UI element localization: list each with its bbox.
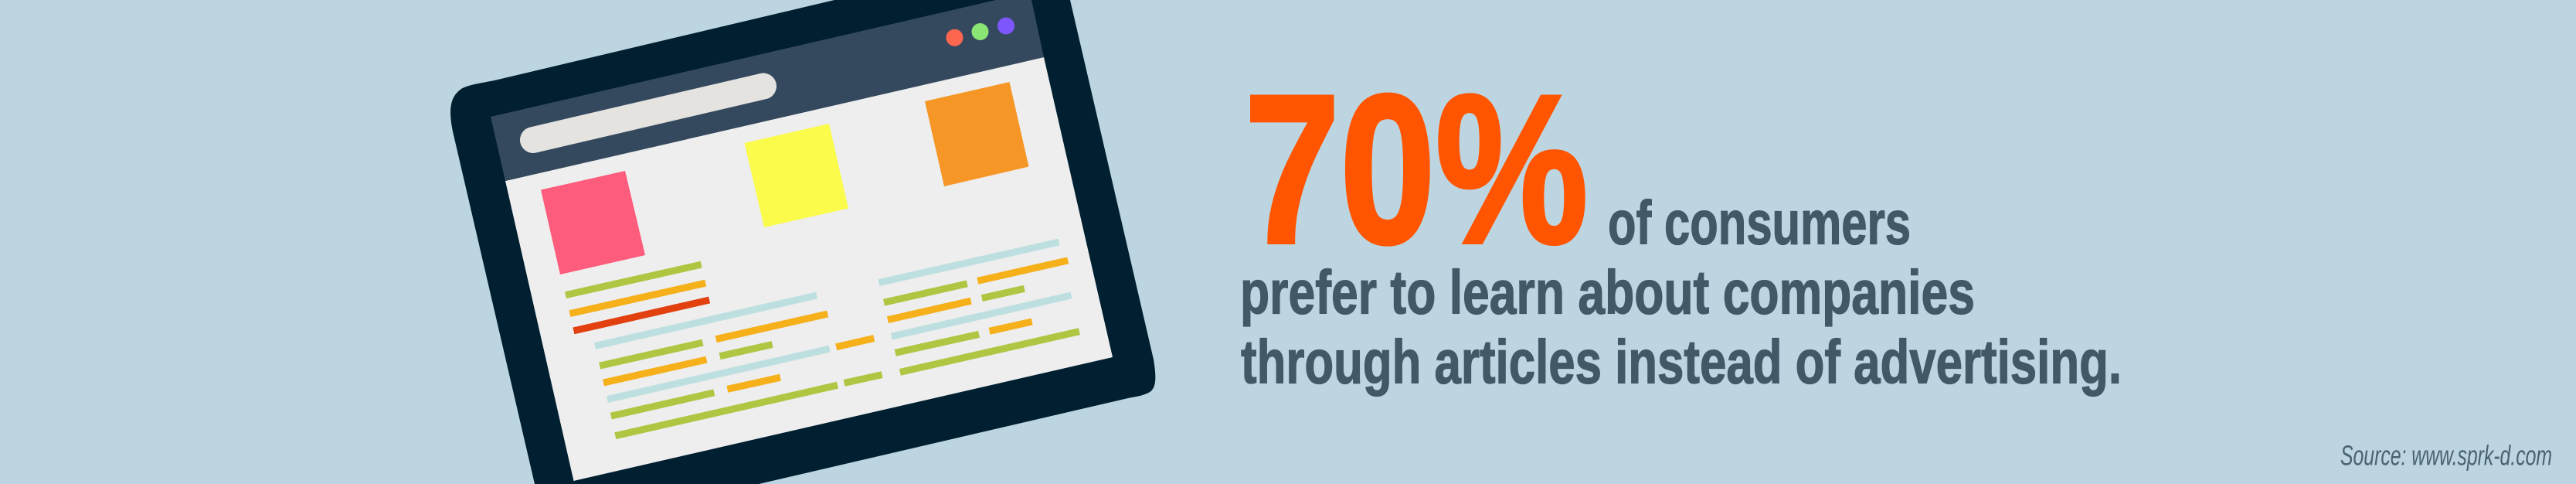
middle column text lines bbox=[595, 295, 882, 436]
big statistic: 70% bbox=[1244, 51, 1589, 288]
icon: tablet showing a web page bbox=[450, 0, 1155, 484]
statistic text line 3: through articles instead of advertising. bbox=[1241, 328, 2122, 397]
left column text lines bbox=[566, 264, 709, 331]
right column text lines bbox=[878, 242, 1079, 372]
yellow image block bbox=[745, 124, 848, 227]
pink image block bbox=[541, 171, 645, 274]
address bar bbox=[533, 87, 763, 140]
orange image block bbox=[925, 82, 1029, 186]
statistic text line 2: prefer to learn about companies bbox=[1240, 258, 1975, 327]
window buttons bbox=[946, 17, 1014, 46]
browser header bar bbox=[491, 0, 1044, 181]
statistic text line 1: of consumers bbox=[1608, 189, 1911, 257]
screen page area bbox=[505, 57, 1113, 481]
tablet body bbox=[450, 0, 1155, 484]
